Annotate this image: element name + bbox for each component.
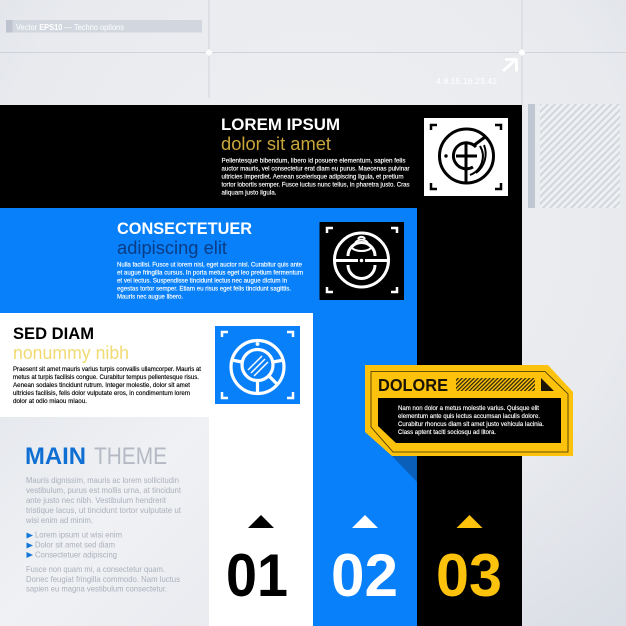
panel: main theme [0,417,209,626]
text block: elementum ante quis lectus accumsan iaculis dolore. [398,413,540,420]
text block: Aenean sodales tincidunt rutrum. Integer molestie, dolor sit amet [13,382,190,389]
text block: ultricies facilisis, felis dolor vulputate eros, in condimentum lorem [13,390,190,397]
step 03: 03 [436,542,502,609]
text block: et vel lectus. Suspendisse tincidunt lectus nec augue dictum in [117,278,287,284]
text block: aliquam justo ligula. [222,190,277,196]
panel: blue column [313,208,417,626]
text block: intro [25,476,182,525]
panel: white column [209,313,313,626]
text block: intro: Mauris dignissim, mauris ac lorem sollicitudin [26,476,179,485]
text block: Praesent sit amet mauris varius turpis convallis ullamcorper. Mauris at [13,366,201,373]
text block: closing: Fusce non quam mi, a consectetur quam. [26,565,165,574]
heading: DOLORE [378,375,448,395]
text block [222,158,410,196]
text block: et augue fringilla cursus. In porta metus eget leo pretium fermentum [117,270,303,276]
bullet list: Dolor sit amet sed diam [35,540,115,550]
step 02: 02 [331,542,398,609]
text block: closing [26,565,180,594]
grid lines [0,0,626,105]
bullet list [26,530,122,560]
text block: Nulla facilisi. Fusce ut lorem nisl, eget auctor nisl. Curabitur quis ante [117,262,302,268]
text block: closing: Donec feugiat fringilla commodo. Nam luctus [26,575,180,584]
text block: Pellentesque bibendum, libero id posuere elementum, sapien felis [222,158,406,164]
text block [13,366,201,405]
text block: intro: vestibulum, purus est mollis urna, at tincidunt [26,486,182,495]
text block: auctor mauris, vel consectetur erat diam eu purus. Maecenas pulvinar [222,166,410,172]
panel: sed diam [0,313,313,417]
bullet list: Consectetuer adipiscing [35,550,117,560]
step 01 [226,515,288,609]
icon: corner arrow [503,59,516,72]
text block [398,405,544,436]
icon: lens wheel [215,326,300,404]
subheading: nonummy nibh [13,342,129,363]
text block: intro: wisi enim ad minim. [25,516,93,525]
heading: SED DIAM [13,324,94,343]
heading: LOREM IPSUM [221,115,340,134]
text block: egestas tortor semper. Etiam eu risus eget felis tincidunt sagittis. [117,286,291,292]
text block: closing: sapien eu magna vestibulum consectetur. [26,584,167,594]
hatch bar [456,378,535,391]
callout shadow [392,456,417,482]
grid crosses [206,50,525,56]
header tag: Vector EPS10 — Techno options [16,23,124,32]
text block: dolor at odio miaou miaou. [13,398,87,405]
panel: lorem ipsum [0,105,522,208]
text block: intro: ante justo nec nibh. Vestibulum hendrerit [26,496,167,505]
subheading: dolor sit amet [221,133,331,154]
code number: 4.8.15.16.23.42 [436,77,498,86]
text block: Nam non dolor a metus molestie varius. Quisque elit [398,405,539,412]
icon: split globe [320,222,404,300]
icon: target disc [424,118,508,196]
text block: Class aptent taciti sociosqu ad litora. [398,429,496,436]
text block: intro: tristique lacus, ut tincidunt tortor vulputate ut [26,506,182,515]
text block: Curabitur rhoncus diam sit amet justo vehicula lacinia. [398,421,544,428]
corner mark [541,378,554,391]
step 01: 01 [226,542,288,609]
text block: metus at turpis facilisis congue. Curabitur tempus pellentesque risus. [13,374,199,381]
header tag [6,20,202,32]
panel: black column [417,105,522,626]
decorative side strip [528,104,620,208]
subheading: adipiscing elit [117,237,227,258]
text block: tortor lobortis semper. Fusce luctus nunc tellus, in pharetra justo. Cras [222,182,410,188]
text block: Mauris nec augue libero. [117,294,183,300]
text block: ultricies imperdiet. Aenean scelerisque adipiscing ligula, et pretium [222,174,404,180]
bullet list: Lorem ipsum ut wisi enim [35,530,122,540]
callout: dolore [365,365,573,456]
heading: theme: THEME [94,443,167,470]
text block [117,262,303,300]
heading: main theme: MAIN [25,443,86,470]
heading: CONSECTETUER [117,219,252,238]
panel: consectetuer [0,208,417,313]
